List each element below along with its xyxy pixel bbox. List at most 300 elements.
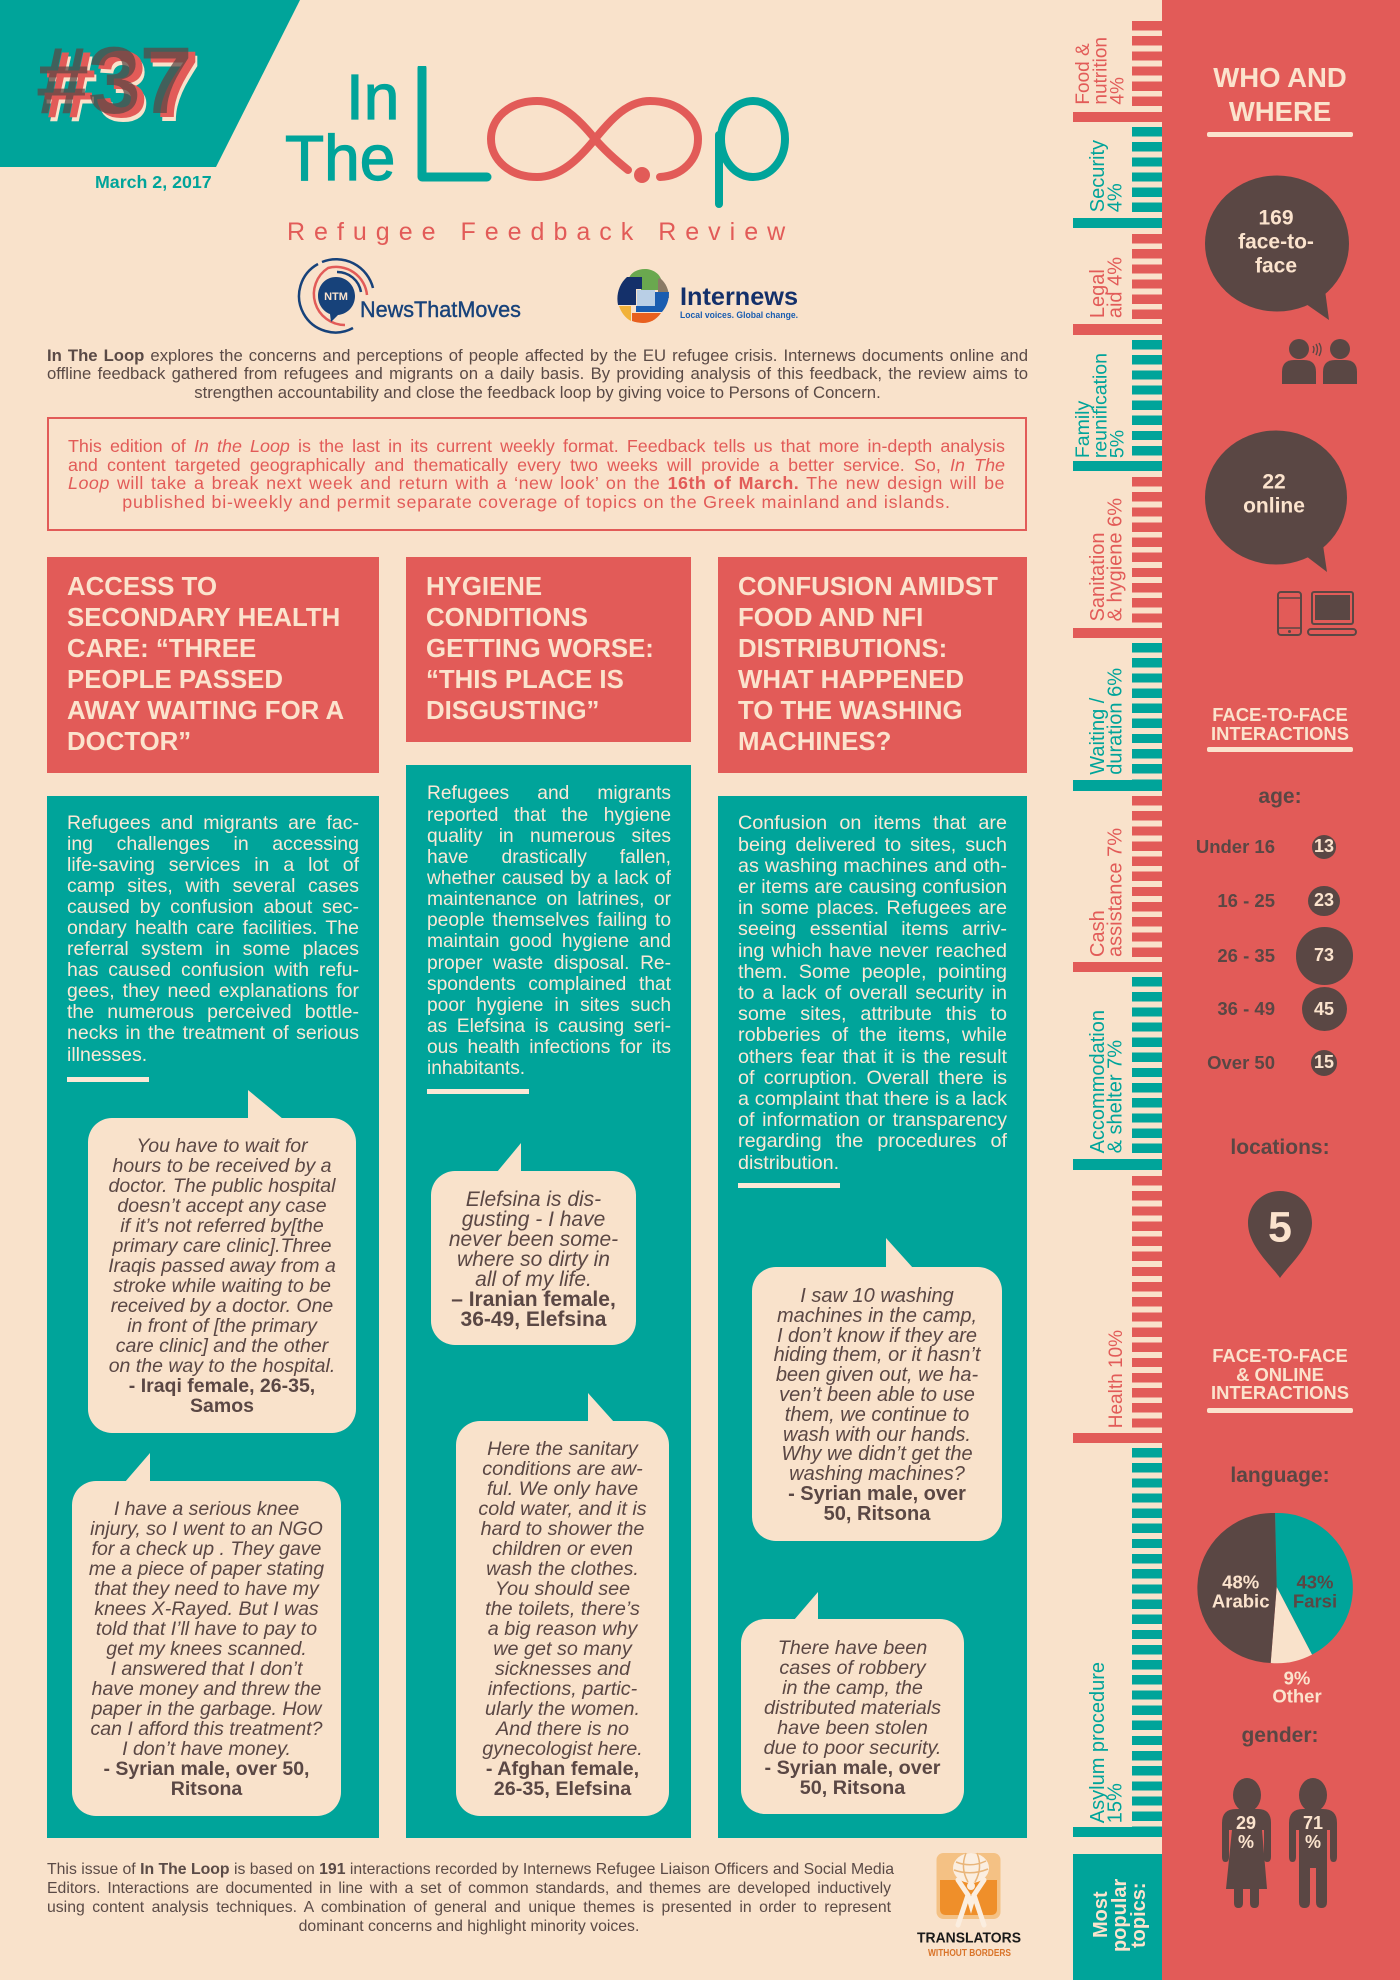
speech bubble: 22 online: online bbox=[1243, 494, 1305, 518]
intro text: In The Loop explores the concerns and perceptions of people affected by the EU refugee crisis. Internews documents online and bbox=[47, 346, 1028, 365]
value circle bbox=[1302, 987, 1346, 1031]
body text: Refugees and migrants bbox=[427, 783, 671, 804]
icon: male figure 71%: % bbox=[1305, 1832, 1321, 1852]
label: aid 4% bbox=[1104, 257, 1126, 319]
topic bar: Asylum procedure bbox=[1073, 1448, 1162, 1837]
heading: who and where bbox=[1180, 61, 1380, 128]
pie chart: language: Arabic bbox=[1212, 1590, 1269, 1612]
quote text: conditions are aw- bbox=[482, 1458, 643, 1480]
pie chart: language bbox=[1195, 1508, 1365, 1708]
icon: male figure 71% bbox=[1286, 1776, 1340, 1910]
body text: camp sites, with several cases bbox=[67, 875, 359, 897]
quote text: And there is no bbox=[496, 1718, 629, 1740]
bubble tail bbox=[125, 1453, 150, 1482]
quote text: I have a serious knee bbox=[114, 1498, 299, 1520]
subheading: language: language: bbox=[1230, 1464, 1330, 1487]
notice text bbox=[68, 436, 1005, 512]
topic bar: Accommodation & shelter bbox=[1073, 977, 1162, 1170]
date: March 2, 2017 bbox=[95, 172, 212, 192]
body text: ing which have never reached bbox=[738, 940, 1007, 962]
subheading: age: age: bbox=[1258, 785, 1302, 808]
logo: Internews: Internews bbox=[680, 283, 798, 311]
heading text: DOCTOR” bbox=[67, 728, 191, 756]
logo word Loop drawn with infinity bbox=[418, 66, 789, 208]
subheading: gender: gender: bbox=[1241, 1724, 1318, 1747]
label: 15% bbox=[1104, 1783, 1126, 1823]
body text: of corruption. Overall there is bbox=[738, 1067, 1007, 1089]
body text: seeing essential items arriv- bbox=[738, 918, 1007, 940]
body text: distribution. bbox=[738, 1152, 839, 1174]
icon: location pin with 5 bbox=[1245, 1188, 1315, 1281]
topic bar: Cash assistance bbox=[1073, 796, 1162, 972]
heading text: SECONDARY HEALTH bbox=[67, 604, 340, 632]
heading text: CONDITIONS bbox=[426, 604, 588, 632]
heading text bbox=[426, 572, 654, 724]
logo: Translators Without Borders bbox=[917, 1852, 1021, 1959]
intro text bbox=[47, 346, 1028, 402]
quote text: distributed materials bbox=[764, 1697, 941, 1719]
ticks bbox=[1132, 1448, 1162, 1826]
body text: spondents complained that bbox=[427, 974, 671, 995]
value circle: 15 bbox=[1314, 1052, 1334, 1072]
ticks bbox=[1132, 340, 1162, 461]
value circle: 73 bbox=[1314, 945, 1334, 965]
icon: two people talking bbox=[1280, 336, 1360, 386]
subheading: locations: locations: bbox=[1230, 1136, 1330, 1159]
footer text: using content analysis techniques. A combination of general and unique themes is presented in order to represent bbox=[47, 1899, 891, 1916]
quote text: I answered that I don’t bbox=[111, 1658, 302, 1680]
heading text: DISGUSTING” bbox=[426, 696, 599, 724]
quote text: the toilets, there’s bbox=[485, 1598, 640, 1620]
heading text: MACHINES? bbox=[738, 728, 891, 756]
quote text: Ritsona bbox=[171, 1778, 242, 1800]
underline bbox=[738, 1183, 840, 1188]
heading: face-to-face interactions: INTERACTIONS bbox=[1211, 723, 1349, 744]
quote text: ularly the women. bbox=[485, 1698, 640, 1720]
ticks bbox=[1132, 127, 1162, 218]
quote text: 36-49, Elefsina bbox=[461, 1308, 606, 1330]
row label: Under 16 bbox=[1196, 836, 1275, 857]
quote text: Elefsina is dis- bbox=[466, 1188, 601, 1210]
body text: ous health infections for its bbox=[427, 1037, 671, 1058]
body text: of information or transparency bbox=[738, 1109, 1007, 1131]
topic bar: Waiting / duration bbox=[1073, 643, 1162, 791]
quote text: we get so many bbox=[493, 1638, 632, 1660]
label bbox=[1073, 37, 1129, 105]
heading: who and where: WHERE bbox=[1229, 96, 1331, 126]
quote text: have been stolen bbox=[777, 1717, 928, 1739]
quote text: Samos bbox=[190, 1395, 254, 1417]
heading: who and where: WHO AND bbox=[1213, 62, 1347, 93]
quote text: paper in the garbage. How bbox=[92, 1698, 321, 1720]
major tick bbox=[1073, 1827, 1162, 1837]
quote text: ful. We only have bbox=[487, 1478, 638, 1500]
body text: whether caused by a lack of bbox=[427, 868, 671, 889]
quote text bbox=[478, 1438, 647, 1800]
body text: poor hygiene in sites such bbox=[427, 995, 671, 1016]
speech bubble: 169 face-to-face bbox=[1200, 170, 1355, 325]
pie chart: language: 9% bbox=[1284, 1668, 1310, 1688]
most popular topics label bbox=[1073, 1854, 1162, 1980]
quote text: hours to be received by a bbox=[113, 1155, 331, 1177]
issue number: #37 bbox=[43, 32, 199, 138]
heading: face-to-face and online interactions bbox=[1180, 1347, 1380, 1403]
bubble tail bbox=[886, 1238, 913, 1268]
ticks bbox=[1132, 476, 1162, 628]
label: nutrition bbox=[1090, 37, 1111, 105]
body text bbox=[738, 812, 1008, 1174]
quote text bbox=[108, 1135, 336, 1417]
row label: 36 - 49 bbox=[1217, 998, 1275, 1019]
panel: column 1 heading bbox=[47, 557, 379, 773]
body text: others fear that it is the result bbox=[738, 1046, 1007, 1068]
value circle bbox=[1311, 1050, 1337, 1076]
icon: phone and laptop bbox=[1275, 589, 1360, 638]
panel: column 3 body bbox=[718, 796, 1027, 1838]
body text: maintain good hygiene and bbox=[427, 931, 671, 952]
label bbox=[1087, 1010, 1126, 1154]
footer text: dominant concerns and highlight minority voices. bbox=[299, 1918, 639, 1935]
heading text: CONFUSION AMIDST bbox=[738, 572, 998, 600]
icon: male figure 71%: 71 bbox=[1303, 1813, 1323, 1833]
label text: popular bbox=[1109, 1878, 1131, 1952]
quote text: them, we continue to bbox=[785, 1404, 969, 1426]
quote text: infections, partic- bbox=[488, 1678, 637, 1700]
quote text: machines in the camp, bbox=[777, 1305, 977, 1327]
body text: some sites, attribute this to bbox=[738, 1003, 1007, 1025]
bubble tail bbox=[588, 1393, 614, 1422]
footer text bbox=[47, 1861, 894, 1935]
label: & shelter 7% bbox=[1104, 1040, 1126, 1153]
label bbox=[1087, 140, 1126, 212]
quote text: doesn’t accept any case bbox=[117, 1195, 327, 1217]
speech bubble: 22 online: 22 bbox=[1262, 470, 1286, 494]
quote text: There have been bbox=[778, 1637, 927, 1659]
label bbox=[1072, 353, 1129, 458]
quote text: 26-35, Elefsina bbox=[494, 1778, 631, 1800]
issue number: #37 bbox=[36, 28, 192, 134]
row label: Over 50 bbox=[1207, 1052, 1275, 1073]
label bbox=[1087, 828, 1126, 957]
topic bar: Health bbox=[1073, 1176, 1162, 1443]
quote text: washing machines? bbox=[789, 1463, 965, 1485]
value circle bbox=[1308, 886, 1340, 916]
label: & hygiene 6% bbox=[1104, 498, 1126, 621]
heading: face-to-face and online interactions: FACE-TO-FACE bbox=[1212, 1345, 1348, 1366]
icon: female figure 29% bbox=[1220, 1776, 1274, 1910]
heading text: WHAT HAPPENED bbox=[738, 666, 964, 694]
quote text: that they need to have my bbox=[94, 1578, 319, 1600]
quote text: - Syrian male, over bbox=[788, 1483, 966, 1505]
panel: column 2 body bbox=[406, 765, 691, 1838]
ticks bbox=[1132, 977, 1162, 1159]
major tick bbox=[1073, 962, 1162, 972]
intro text: offline feedback gathered from refugees and migrants on a daily basis. By providing analysis of this feedback, the review aims to bbox=[47, 364, 1028, 383]
subtitle: Refugee Feedback Review bbox=[287, 218, 794, 246]
body text: them. Some people, pointing bbox=[738, 961, 1007, 983]
quote text: can I afford this treatment? bbox=[91, 1718, 322, 1740]
quote text: - Iraqi female, 26-35, bbox=[129, 1375, 315, 1397]
major tick bbox=[1073, 1433, 1162, 1443]
label: Waiting / bbox=[1087, 697, 1109, 774]
quote text: me a piece of paper stating bbox=[89, 1558, 324, 1580]
heading text: “THIS PLACE IS bbox=[426, 666, 624, 694]
label: Food & bbox=[1073, 44, 1094, 105]
logo: Internews bbox=[617, 269, 798, 323]
speech bubble: 169 face-to-face: 169 bbox=[1258, 206, 1294, 230]
quote text: care clinic] and the other bbox=[116, 1335, 328, 1357]
label: Legal bbox=[1087, 270, 1109, 319]
quote text bbox=[774, 1285, 982, 1525]
heading text: PEOPLE PASSED bbox=[67, 666, 283, 694]
body text: robberies of the items, while bbox=[738, 1024, 1007, 1046]
body text: have drastically fallen, bbox=[427, 847, 671, 868]
body text bbox=[427, 783, 671, 1079]
bubble tail bbox=[248, 1090, 283, 1119]
quote text: I don’t know if they are bbox=[777, 1325, 977, 1347]
label: Cash bbox=[1087, 910, 1109, 957]
pie chart: language: 43% bbox=[1296, 1572, 1334, 1592]
body text: gees, they need explanations for bbox=[67, 980, 359, 1002]
quote text: I don’t have money. bbox=[122, 1738, 291, 1760]
underline bbox=[67, 1077, 149, 1082]
quote text: stroke while waiting to be bbox=[113, 1275, 331, 1297]
quote text: received by a doctor. One bbox=[111, 1295, 333, 1317]
quote text: I saw 10 washing bbox=[800, 1285, 954, 1307]
body text: ondary health care facilities. The bbox=[67, 917, 359, 939]
topic bar: Legal aid bbox=[1073, 234, 1162, 335]
speech bubble: 169 face-to-face: face bbox=[1255, 254, 1297, 278]
body text: life-saving services in a lot of bbox=[67, 854, 359, 876]
quote text: 50, Ritsona bbox=[824, 1503, 930, 1525]
pie chart: language: 48% bbox=[1222, 1572, 1259, 1592]
heading text: GETTING WORSE: bbox=[426, 634, 654, 662]
body text: a complaint that there is a lack bbox=[738, 1088, 1007, 1110]
label: Security bbox=[1087, 140, 1109, 212]
heading: face-to-face interactions: FACE-TO-FACE bbox=[1212, 704, 1348, 725]
body text: Refugees and migrants are fac- bbox=[67, 812, 359, 834]
logo: Internews: Local voices. Global change. bbox=[680, 310, 798, 320]
red side panel bbox=[1162, 0, 1400, 1980]
footer text: Editors. Interactions are documented in line with a set of common standards, and themes are developed inductively bbox=[47, 1880, 891, 1897]
quote bubble bbox=[752, 1267, 1002, 1541]
pie chart: language: Other bbox=[1272, 1686, 1322, 1706]
quote text: children or even bbox=[492, 1538, 633, 1560]
quote text: Why we didn’t get the bbox=[781, 1443, 973, 1465]
speech bubble: 169 face-to-face: face-to- bbox=[1238, 230, 1314, 254]
quote text: for a check up . They gave bbox=[92, 1538, 321, 1560]
notice text: published bi-weekly and permit separate coverage of topics on the Greek mainland and islands. bbox=[122, 492, 951, 512]
quote text: knees X-Rayed. But I was bbox=[94, 1598, 319, 1620]
quote text bbox=[449, 1188, 618, 1330]
label: Family bbox=[1072, 401, 1094, 458]
label text: Most bbox=[1090, 1892, 1112, 1938]
quote text: get my knees scanned. bbox=[106, 1638, 307, 1660]
label bbox=[1090, 1662, 1125, 1823]
body text: being delivered to sites, such bbox=[738, 834, 1007, 856]
quote bubble bbox=[456, 1421, 669, 1816]
icon: female figure 29%: 29 bbox=[1236, 1813, 1256, 1833]
quote text: hiding them, or it hasn’t bbox=[774, 1344, 980, 1366]
quote text: told that I’ll have to pay to bbox=[96, 1618, 317, 1640]
heading text: ACCESS TO bbox=[67, 572, 217, 600]
heading: face-to-face and online interactions: INTERACTIONS bbox=[1211, 1382, 1349, 1403]
body text: reported that the hygiene bbox=[427, 805, 671, 826]
heading text bbox=[738, 572, 998, 756]
major tick bbox=[1073, 112, 1162, 122]
value circle: 13 bbox=[1314, 836, 1334, 856]
label: Accommodation bbox=[1087, 1010, 1109, 1153]
label: assistance 7% bbox=[1104, 828, 1126, 957]
notice text: Loop will take a break next week and return with a ‘new look’ on the 16th of March. The new design will be bbox=[68, 473, 1005, 493]
quote text: Here the sanitary bbox=[487, 1438, 638, 1460]
logo words In The: The bbox=[285, 122, 395, 194]
label bbox=[1087, 257, 1126, 319]
speech bubble: 22 online bbox=[1200, 425, 1355, 577]
body text: illnesses. bbox=[67, 1044, 147, 1066]
quote bubble bbox=[741, 1619, 964, 1814]
logo: Translators Without Borders: WITHOUT BORDERS bbox=[928, 1948, 1011, 1959]
quote text bbox=[89, 1498, 324, 1800]
panel: column 3 heading bbox=[718, 557, 1027, 773]
body text: Confusion on items that are bbox=[738, 812, 1007, 834]
pie chart: language: Farsi bbox=[1293, 1590, 1337, 1612]
quote text: You have to wait for bbox=[136, 1135, 308, 1157]
ticks bbox=[1132, 234, 1162, 325]
body text: to a lack of overall security in bbox=[738, 982, 1007, 1004]
topic bar: Sanitation & hygiene bbox=[1073, 477, 1162, 638]
heading text: DISTRIBUTIONS: bbox=[738, 634, 947, 662]
ticks bbox=[1132, 643, 1162, 780]
heading text bbox=[67, 572, 344, 756]
label text bbox=[1092, 1877, 1149, 1953]
row label: 26 - 35 bbox=[1217, 945, 1275, 966]
label: Asylum procedure bbox=[1087, 1662, 1109, 1823]
major tick bbox=[1073, 461, 1162, 471]
label text: topics: bbox=[1128, 1882, 1150, 1948]
quote text: - Syrian male, over bbox=[765, 1757, 940, 1779]
body text: referral system in some places bbox=[67, 938, 359, 960]
label: 4% bbox=[1108, 78, 1129, 105]
quote text: on the way to the hospital. bbox=[109, 1355, 335, 1377]
logo: Translators Without Borders: TRANSLATORS bbox=[917, 1930, 1021, 1946]
body text: proper waste disposal. Re- bbox=[427, 953, 671, 974]
logo: News That Moves: NewsThatMoves bbox=[360, 297, 521, 322]
heading underline bbox=[1207, 1408, 1353, 1413]
body text bbox=[67, 812, 360, 1066]
heading underline bbox=[1207, 747, 1353, 752]
label: Sanitation bbox=[1087, 532, 1109, 621]
body text: people themselves failing to bbox=[427, 910, 671, 931]
panel: column 2 heading bbox=[406, 557, 691, 742]
heading text: AWAY WAITING FOR A bbox=[67, 696, 344, 724]
major tick bbox=[1073, 218, 1162, 228]
underline bbox=[427, 1089, 529, 1094]
quote text: wash the clothes. bbox=[486, 1558, 639, 1580]
major tick bbox=[1073, 324, 1162, 335]
major tick bbox=[1073, 1159, 1162, 1170]
major tick bbox=[1073, 628, 1162, 638]
notice box bbox=[47, 417, 1027, 531]
quote text: 50, Ritsona bbox=[800, 1777, 905, 1799]
topic bar: Security bbox=[1073, 127, 1162, 228]
quote bubble bbox=[88, 1118, 356, 1433]
quote text: primary care clinic].Three bbox=[113, 1235, 331, 1257]
quote text: cases of robbery bbox=[779, 1657, 926, 1679]
body text: quality in numerous sites bbox=[427, 826, 671, 847]
body text: maintenance on latrines, or bbox=[427, 889, 671, 910]
heading text: CARE: “THREE bbox=[67, 634, 256, 662]
heading: face-to-face and online interactions: & ONLINE bbox=[1236, 1364, 1324, 1385]
quote text: due to poor security. bbox=[764, 1737, 941, 1759]
body text: caused by confusion about sec- bbox=[67, 896, 359, 918]
quote text: have money and threw the bbox=[92, 1678, 321, 1700]
label bbox=[1087, 498, 1126, 621]
issue number: #37 bbox=[45, 36, 201, 142]
body text: necks in the treatment of serious bbox=[67, 1022, 359, 1044]
quote text: - Syrian male, over 50, bbox=[104, 1758, 309, 1780]
quote text: in front of [the primary bbox=[127, 1315, 317, 1337]
quote text: in the camp, the bbox=[782, 1677, 923, 1699]
tab background bbox=[0, 0, 300, 167]
icon: location pin with 5: 5 bbox=[1268, 1204, 1292, 1252]
body text: the numerous perceived bottle- bbox=[67, 1001, 359, 1023]
panel: column 1 body bbox=[47, 796, 379, 1838]
ticks bbox=[1132, 796, 1162, 962]
body text: as washing machines and oth- bbox=[738, 855, 1007, 877]
bubble tail bbox=[497, 1143, 521, 1172]
quote text: all of my life. bbox=[475, 1268, 592, 1290]
quote text: where so dirty in bbox=[457, 1248, 610, 1270]
logo: News That Moves bbox=[298, 258, 521, 334]
age rows bbox=[1175, 826, 1355, 1088]
quote bubble bbox=[431, 1171, 636, 1345]
topic bar: Family reunification bbox=[1072, 340, 1162, 471]
label: 5% bbox=[1107, 430, 1129, 458]
body text: has caused confusion with refu- bbox=[67, 959, 359, 981]
heading underline bbox=[1207, 132, 1353, 137]
logo words In The bbox=[285, 61, 399, 194]
footer text: This issue of In The Loop is based on 191 interactions recorded by Internews Refugee Liaison Officers and Social Media bbox=[47, 1861, 894, 1878]
notice text: and content targeted geographically and thematically every two weeks will provide a better service. So, In The bbox=[68, 455, 1005, 475]
quote text: never been some- bbox=[449, 1228, 618, 1250]
quote text: You should see bbox=[495, 1578, 630, 1600]
quote text: gynecologist here. bbox=[482, 1738, 643, 1760]
body text: regarding the procedures of bbox=[738, 1130, 1007, 1152]
icon: female figure 29%: % bbox=[1238, 1832, 1254, 1852]
quote text: gusting - I have bbox=[462, 1208, 605, 1230]
quote text: if it’s not referred by[the bbox=[120, 1215, 324, 1237]
ticks bbox=[1132, 1176, 1162, 1432]
heading: face-to-face interactions bbox=[1180, 705, 1380, 743]
value circle: 23 bbox=[1314, 890, 1334, 910]
topic bar: Food & nutrition bbox=[1073, 21, 1162, 122]
body text: in some places. Refugees are bbox=[738, 897, 1007, 919]
intro text: strengthen accountability and close the feedback loop by giving voice to Persons of Concern. bbox=[194, 383, 881, 402]
heading text: HYGIENE bbox=[426, 572, 542, 600]
ticks bbox=[1132, 21, 1162, 112]
label: Health 10% bbox=[1106, 1330, 1127, 1429]
issue number tab bbox=[0, 0, 300, 167]
logo: News That Moves: NTM bbox=[324, 291, 348, 303]
body text: er items are causing confusion bbox=[738, 876, 1007, 898]
label: 4% bbox=[1104, 184, 1126, 212]
label bbox=[1087, 668, 1126, 775]
heading text: FOOD AND NFI bbox=[738, 604, 923, 632]
bubble tail bbox=[794, 1592, 818, 1620]
logo words In The: In bbox=[346, 61, 399, 133]
row label: 16 - 25 bbox=[1217, 890, 1275, 911]
